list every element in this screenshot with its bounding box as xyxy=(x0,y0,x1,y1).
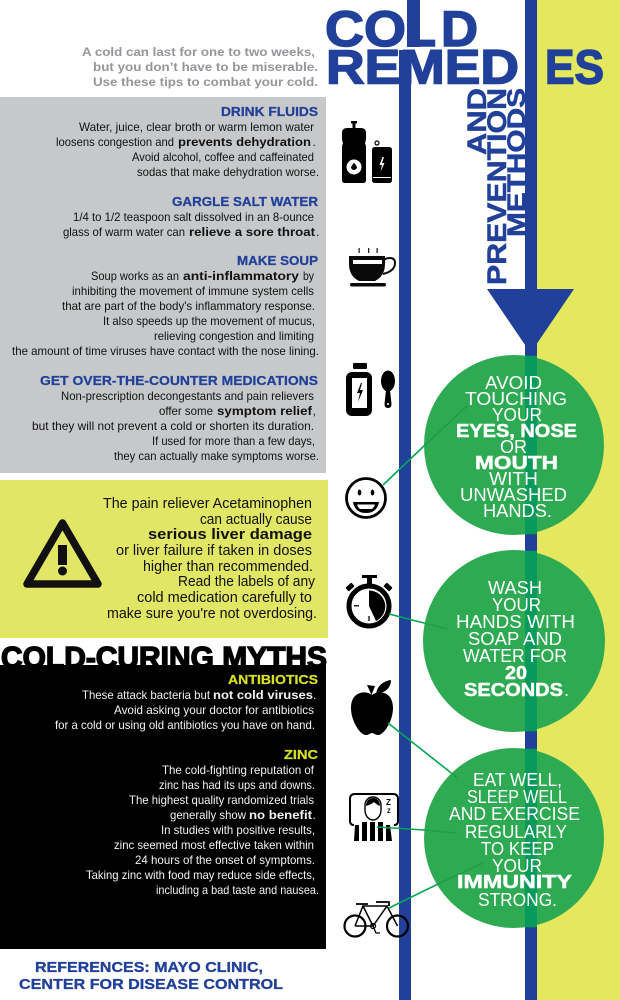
left blue vertical line xyxy=(399,50,411,1000)
myth: zinc xyxy=(86,748,319,897)
panel: remedies xyxy=(0,97,326,473)
myth: antibiotics: not cold viruses xyxy=(213,688,313,702)
remedy: drink fluids: . xyxy=(312,135,316,149)
title: ES xyxy=(545,42,604,94)
wash hands text: WASH xyxy=(488,577,542,598)
myth: zinc: no benefit xyxy=(249,808,312,822)
remedy: drink fluids: Water, juice, clear broth or warm lemon water xyxy=(79,120,314,134)
title: REMED xyxy=(326,42,519,94)
avoid touching text: UNWASHED xyxy=(460,484,567,505)
wash hands text: YOUR xyxy=(492,594,541,615)
remedy: make soup: anti-inflammatory xyxy=(183,269,299,283)
remedy: over-the-counter medications: GET OVER-THE-COUNTER MEDICATIONS xyxy=(40,374,318,388)
avoid touching text: YOUR xyxy=(492,404,542,425)
eat well text: STRONG. xyxy=(478,889,557,910)
right blue vertical line xyxy=(525,0,537,1000)
icon: stopwatch xyxy=(345,575,393,626)
remedy: make soup: that are part of the body's inflammatory response. xyxy=(62,299,315,313)
wash hands text: SOAP AND xyxy=(468,628,562,649)
wash hands text: WATER FOR xyxy=(463,645,567,666)
wash hands text: 20 xyxy=(505,662,527,683)
title: D xyxy=(441,1,478,57)
icon: sleeping person: Z xyxy=(387,809,391,815)
references: REFERENCES: MAYO CLINIC, xyxy=(35,960,263,976)
icon: medicine bottle and spoon xyxy=(346,363,395,416)
myth: zinc: Taking zinc with food may reduce side effects, xyxy=(86,868,315,882)
myth: antibiotics: ANTIBIOTICS xyxy=(228,673,318,687)
remedy: over-the-counter medications: , xyxy=(312,404,316,418)
myth: zinc: The highest quality randomized trials xyxy=(129,793,314,807)
eat well text: TO KEEP xyxy=(481,838,554,859)
myth: antibiotics: . xyxy=(313,688,316,702)
remedy: gargle salt water: relieve a sore throat xyxy=(189,225,315,239)
remedy: drink fluids: loosens congestion and xyxy=(56,135,174,149)
remedy: make soup: inhibiting the movement of immune system cells xyxy=(72,284,314,298)
remedy: over-the-counter medications: they can actually make symptoms worse. xyxy=(114,449,319,463)
myth: zinc: ZINC xyxy=(284,748,318,762)
title xyxy=(325,0,604,94)
icon: warning triangle xyxy=(27,523,98,584)
avoid touching text: EYES, NOSE xyxy=(456,420,577,441)
warning text: higher than recommended. xyxy=(143,559,313,575)
warning text: Read the labels of any xyxy=(178,574,316,590)
arrow head xyxy=(487,289,574,353)
remedy: over-the-counter medications xyxy=(32,374,319,463)
remedy: make soup: relieving congestion and limiting xyxy=(154,329,314,343)
references xyxy=(19,960,283,993)
myths heading: COLD-CURING MYTHS xyxy=(1,640,327,675)
circle: wash hands xyxy=(389,550,605,732)
remedy: over-the-counter medications: but they will not prevent a cold or shorten its duration. xyxy=(32,419,314,433)
myth: zinc: . xyxy=(312,808,316,822)
panel: liver damage warning xyxy=(0,480,328,638)
intro text: A cold can last for one to two weeks, xyxy=(82,45,315,59)
myth: zinc: In studies with positive results, xyxy=(161,823,315,837)
remedy: gargle salt water: 1/4 to 1/2 teaspoon salt dissolved in an 8-ounce xyxy=(73,210,314,224)
icon: coffee cup xyxy=(349,248,395,286)
myth: antibiotics xyxy=(55,673,318,732)
avoid touching text: TOUCHING xyxy=(465,388,567,409)
remedy: gargle salt water: GARGLE SALT WATER xyxy=(172,195,318,209)
icon: water bottle and energy drink can xyxy=(342,121,392,183)
avoid touching text xyxy=(456,372,577,521)
eat well text: YOUR xyxy=(492,855,542,876)
icon: sleeping person: Z xyxy=(386,798,391,807)
warning text xyxy=(103,496,317,622)
myth: zinc: zinc has had its ups and downs. xyxy=(159,778,315,792)
eat well text: EAT WELL, xyxy=(473,769,562,790)
remedy: over-the-counter medications: Non-prescription decongestants and pain relievers xyxy=(61,389,314,403)
myth: zinc: 24 hours of the onset of symptoms. xyxy=(135,853,315,867)
avoid touching text: OR xyxy=(500,436,527,457)
remedy: over-the-counter medications: If used for more than a few days, xyxy=(152,434,315,448)
avoid touching text: WITH xyxy=(489,468,538,489)
remedy: gargle salt water: . xyxy=(316,225,319,239)
connector: apple to circle xyxy=(388,723,457,778)
intro text xyxy=(82,45,318,89)
subtitle: and prevention methods xyxy=(462,88,531,285)
yellow right column xyxy=(537,0,620,1000)
connector: smiley to circle xyxy=(383,405,468,485)
remedy: over-the-counter medications: offer some xyxy=(159,404,213,418)
remedy: drink fluids: sodas that make dehydration worse. xyxy=(137,165,319,179)
title: CO xyxy=(325,1,406,57)
remedy: gargle salt water xyxy=(63,195,319,239)
connector: sleeper to circle xyxy=(377,827,457,833)
avoid touching text: MOUTH xyxy=(475,452,558,473)
eat well text: SLEEP WELL xyxy=(467,786,567,807)
myth: zinc: zinc seemed most effective taken within xyxy=(114,838,314,852)
remedy: make soup xyxy=(12,254,319,358)
avoid touching text: AVOID xyxy=(485,372,542,393)
wash hands text: SECONDS xyxy=(464,679,563,700)
remedy: drink fluids: prevents dehydration xyxy=(178,135,311,149)
wash hands text xyxy=(456,577,575,700)
subtitle: and prevention methods: METHODS xyxy=(503,88,531,237)
title: L xyxy=(405,1,436,57)
remedy: make soup: by xyxy=(303,269,314,283)
myth: zinc: including a bad taste and nausea. xyxy=(156,883,319,897)
warning text: serious liver damage xyxy=(148,527,312,543)
eat well text: AND EXERCISE xyxy=(449,803,580,824)
wash hands text: . xyxy=(564,679,569,700)
references: CENTER FOR DISEASE CONTROL xyxy=(19,977,283,993)
wash hands text: HANDS WITH xyxy=(456,611,575,632)
warning text: can actually cause xyxy=(200,512,312,528)
warning text: or liver failure if taken in doses xyxy=(116,543,312,559)
myth: zinc: The cold-fighting reputation of xyxy=(162,763,315,777)
intro text: but you don’t have to be miserable. xyxy=(93,60,318,74)
icon: sleeping person xyxy=(350,794,398,841)
myth: antibiotics: Avoid asking your doctor for antibiotics xyxy=(114,703,314,717)
warning text: make sure you're not overdosing. xyxy=(107,606,317,622)
warning text: cold medication carefully to xyxy=(137,590,312,606)
remedy: drink fluids: DRINK FLUIDS xyxy=(221,105,318,119)
eat well text: REGULARLY xyxy=(465,821,567,842)
myth: zinc: generally show xyxy=(170,808,246,822)
avoid touching text: HANDS. xyxy=(483,500,552,521)
icon: apple xyxy=(351,680,393,735)
warning text: The pain reliever Acetaminophen xyxy=(103,496,312,512)
remedy: make soup: MAKE SOUP xyxy=(237,254,318,268)
subtitle: and prevention methods: AND xyxy=(462,88,492,155)
panel: cold-curing myths xyxy=(0,640,327,949)
remedy: gargle salt water: glass of warm water can xyxy=(63,225,185,239)
connector: bicycle to circle xyxy=(389,863,483,908)
icon: smiley face xyxy=(346,478,386,518)
connector: stopwatch to circle xyxy=(389,614,447,629)
intro text: Use these tips to combat your cold. xyxy=(93,75,318,89)
icon: bicycle xyxy=(344,902,408,936)
circle: eat well, sleep well, exercise xyxy=(377,723,604,928)
remedy: make soup: It also speeds up the movement of mucus, xyxy=(103,314,315,328)
eat well text: IMMUNITY xyxy=(457,871,573,892)
remedy: over-the-counter medications: symptom relief xyxy=(217,404,313,418)
remedy: drink fluids xyxy=(56,105,319,179)
remedy: drink fluids: Avoid alcohol, coffee and caffeinated xyxy=(132,150,314,164)
myth: antibiotics: These attack bacteria but xyxy=(82,688,211,702)
myth: antibiotics: for a cold or using old antibiotics you have on hand. xyxy=(55,718,315,732)
eat well text xyxy=(449,769,580,910)
circle: avoid touching xyxy=(383,355,604,535)
subtitle: and prevention methods: PREVENTION xyxy=(482,88,512,285)
remedy: make soup: Soup works as an xyxy=(91,269,179,283)
remedy: make soup: the amount of time viruses have contact with the nose lining. xyxy=(12,344,319,358)
